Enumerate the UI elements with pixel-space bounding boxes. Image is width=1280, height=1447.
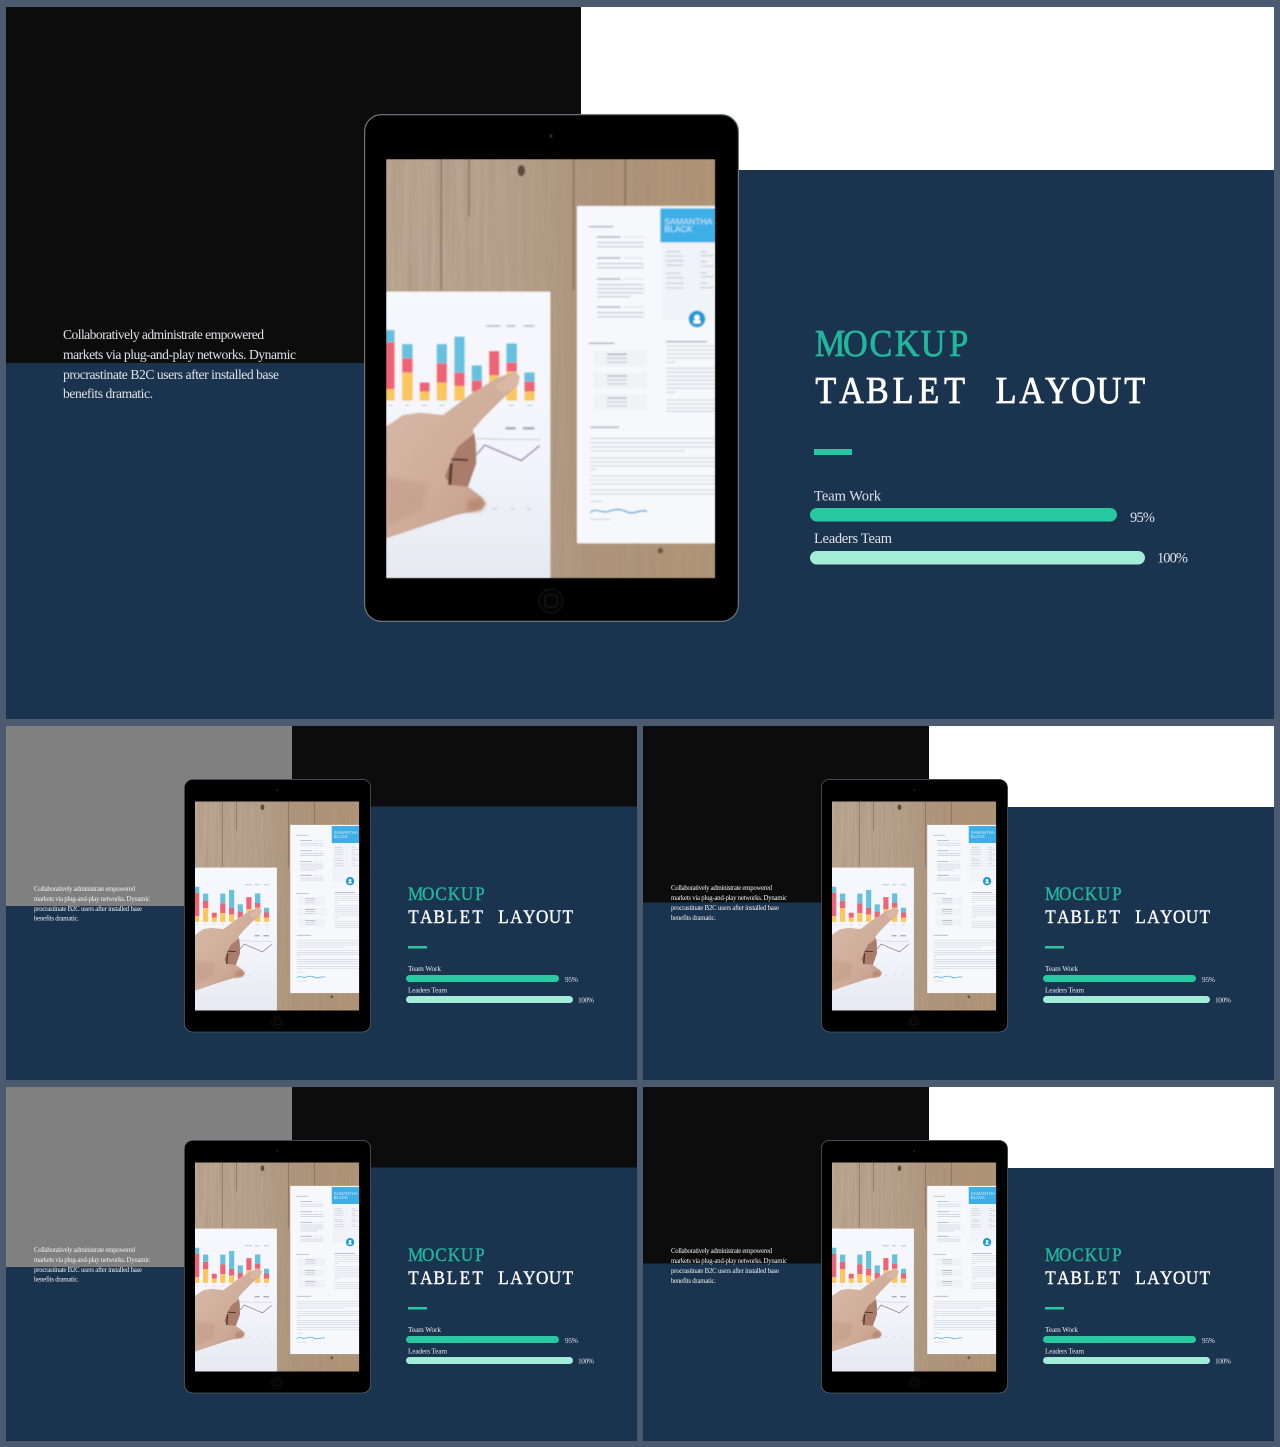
progress: leaders team: Leaders Team (1045, 1346, 1084, 1356)
progress: leaders team: 100% (1215, 996, 1231, 1004)
heading: TABLET LAYOUT (815, 369, 1145, 411)
body text (671, 885, 787, 922)
body text: benefits dramatic. (671, 915, 716, 922)
tablet mockup (821, 779, 1008, 1032)
body text: Collaboratively administrate empowered (63, 327, 264, 342)
body text: procrastinate B2C users after installed base (34, 906, 142, 913)
body text: procrastinate B2C users after installed base (63, 367, 279, 382)
navy background (643, 726, 1274, 1080)
navy background (6, 7, 1274, 719)
accent line (1045, 946, 1064, 948)
heading: MOCKUP (408, 883, 485, 904)
progress: leaders team (1043, 1346, 1231, 1366)
body text (34, 1247, 150, 1284)
body text: Collaboratively administrate empowered (34, 1247, 136, 1254)
body text: markets via plug-and-play networks. Dynamic (671, 895, 787, 902)
progress: team work (406, 964, 578, 984)
progress: team work: Team Work (1045, 1325, 1078, 1334)
panel: main slide (6, 7, 1274, 719)
progress: team work: Team Work (408, 964, 441, 973)
body text: Collaboratively administrate empowered (671, 885, 773, 892)
heading (1045, 883, 1210, 927)
white block (581, 7, 1274, 170)
body text: benefits dramatic. (34, 916, 79, 922)
progress: leaders team: 100% (1157, 550, 1188, 566)
progress: leaders team: Leaders Team (814, 531, 893, 547)
progress: team work: 95% (1130, 510, 1155, 526)
navy background (6, 1087, 637, 1441)
grey block (6, 726, 292, 906)
progress: team work: 95% (565, 975, 578, 984)
white block (929, 726, 1274, 807)
panel: small slide bottom right (643, 1087, 1274, 1441)
heading (408, 1244, 573, 1288)
heading: MOCKUP (1045, 883, 1122, 904)
body text: markets via plug-and-play networks. Dynamic (63, 347, 296, 362)
progress: team work: Team Work (408, 1325, 441, 1334)
body text: Collaboratively administrate empowered (671, 1248, 773, 1255)
tablet mockup (184, 779, 371, 1032)
progress: leaders team: Leaders Team (1045, 986, 1084, 994)
progress: leaders team: 100% (578, 1356, 594, 1366)
body text: markets via plug-and-play networks. Dynamic (671, 1258, 787, 1265)
accent line (814, 449, 852, 455)
progress: leaders team (1043, 986, 1231, 1004)
body text: benefits dramatic. (34, 1276, 79, 1284)
body text (63, 327, 296, 401)
progress: team work (406, 1325, 578, 1345)
accent line (408, 1307, 427, 1310)
progress: leaders team (406, 986, 594, 1004)
progress: leaders team: Leaders Team (408, 986, 447, 994)
body text: procrastinate B2C users after installed base (671, 1268, 779, 1275)
heading: MOCKUP (815, 322, 968, 364)
progress: team work: 95% (1202, 1336, 1215, 1345)
panel: small slide top right (643, 726, 1274, 1080)
navy background (643, 1087, 1274, 1441)
body text: markets via plug-and-play networks. Dynamic (34, 896, 150, 903)
progress: leaders team: Leaders Team (408, 1346, 447, 1356)
progress: team work (1043, 1325, 1215, 1345)
body text: markets via plug-and-play networks. Dynamic (34, 1257, 150, 1264)
tablet mockup (821, 1140, 1008, 1393)
grey block (6, 1087, 292, 1267)
heading: TABLET LAYOUT (408, 1267, 573, 1288)
body text: benefits dramatic. (63, 386, 153, 401)
panel: small slide bottom left (6, 1087, 637, 1441)
black block (6, 7, 581, 363)
navy background (6, 726, 637, 1080)
body text: procrastinate B2C users after installed base (34, 1267, 142, 1274)
panel: small slide top left (6, 726, 637, 1080)
body text (671, 1248, 787, 1285)
black block (643, 726, 929, 902)
heading (815, 322, 1145, 411)
black block (292, 726, 637, 806)
accent line (408, 946, 427, 948)
heading (408, 883, 573, 927)
accent line (1045, 1307, 1064, 1310)
progress: team work (1043, 964, 1215, 984)
white block (929, 1087, 1274, 1168)
heading: TABLET LAYOUT (1045, 906, 1210, 927)
progress: leaders team (406, 1346, 594, 1366)
progress: team work: Team Work (814, 488, 882, 504)
heading: MOCKUP (408, 1244, 485, 1265)
progress: team work: 95% (565, 1336, 578, 1345)
progress: leaders team (810, 531, 1188, 566)
tablet mockup (184, 1140, 371, 1393)
progress: leaders team: 100% (578, 996, 594, 1004)
progress: leaders team: 100% (1215, 1356, 1231, 1366)
heading (1045, 1244, 1210, 1288)
heading: TABLET LAYOUT (1045, 1267, 1210, 1288)
progress: team work: Team Work (1045, 964, 1078, 973)
body text (34, 886, 150, 922)
body text: Collaboratively administrate empowered (34, 886, 136, 893)
heading: MOCKUP (1045, 1244, 1122, 1265)
black block (643, 1087, 929, 1264)
body text: procrastinate B2C users after installed base (671, 905, 779, 912)
progress: team work: 95% (1202, 975, 1215, 984)
body text: benefits dramatic. (671, 1278, 716, 1285)
heading: TABLET LAYOUT (408, 906, 573, 927)
black block (292, 1087, 637, 1168)
tablet mockup (365, 115, 738, 621)
progress: team work (810, 488, 1155, 526)
